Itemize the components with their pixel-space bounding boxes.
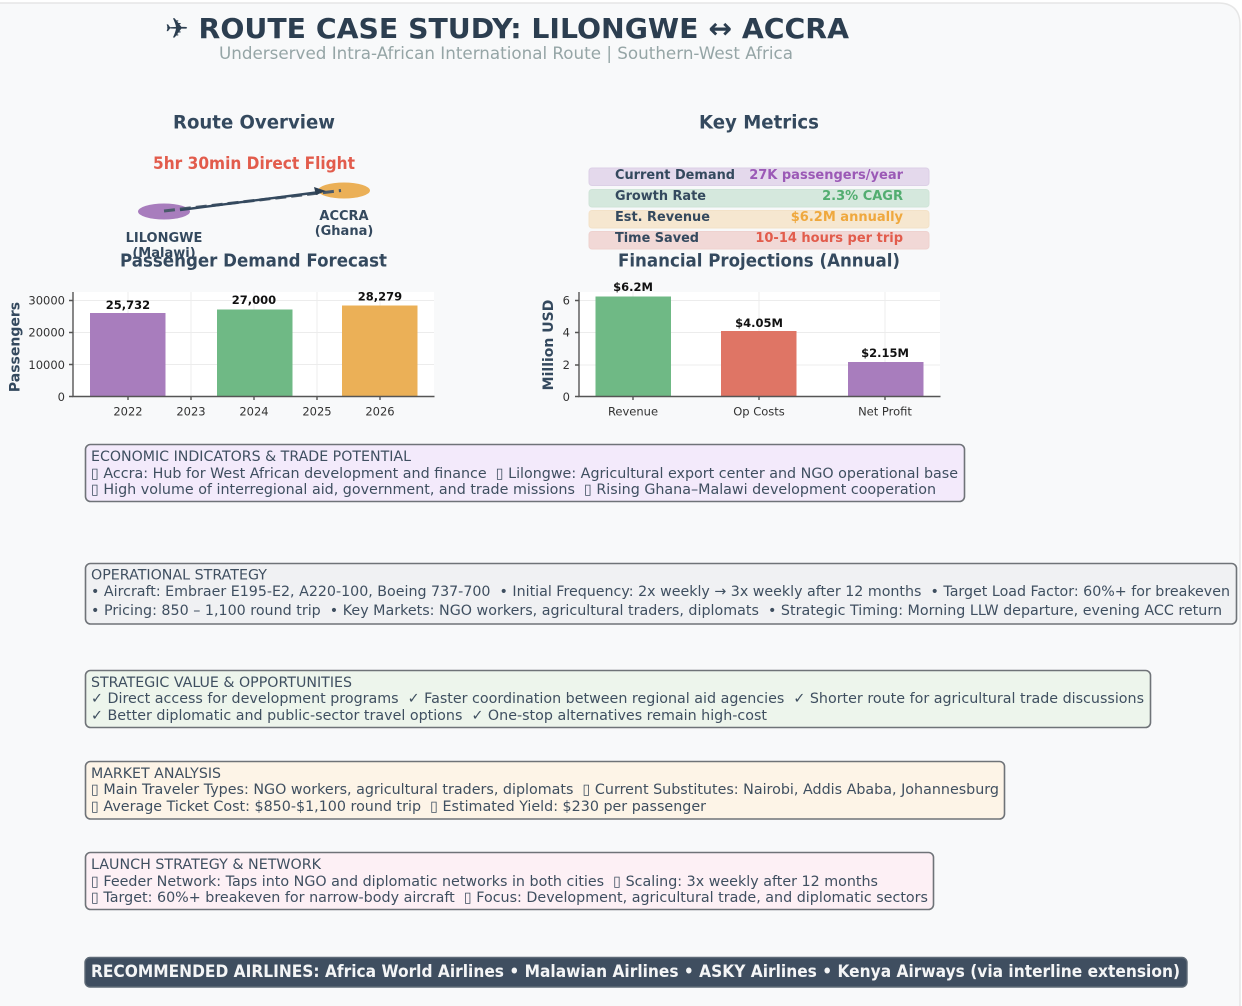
bar chart: financial projections bbox=[541, 280, 940, 418]
metric: time saved: 10-14 hours per trip bbox=[755, 231, 903, 246]
label: Accra: ACCRA bbox=[319, 209, 369, 224]
heading: STRATEGIC VALUE & OPPORTUNITIES bbox=[91, 675, 352, 691]
value labels bbox=[106, 290, 402, 312]
bar: operating costs bbox=[721, 331, 796, 396]
panel: recommended airlines: RECOMMENDED AIRLINES: Africa World Airlines • Malawian Airlines • ASKY Airlines • Kenya Airways (via interline extension) bbox=[91, 962, 1180, 981]
value labels: $2.15M bbox=[861, 346, 909, 360]
text line: ▯ Main Traveler Types: NGO workers, agricultural traders, diplomats ▯ Current Substitutes: Nairobi, Addis Ababa, Johannesburg bbox=[91, 782, 999, 798]
y axis title: Million USD bbox=[541, 300, 557, 390]
text line: • Aircraft: Embraer E195-E2, A220-100, Boeing 737-700 • Initial Frequency: 2x weekly → 3x weekly after 12 months • Target Load Factor: 60%+ for breakeven bbox=[91, 584, 1230, 600]
metric: time saved: Time Saved bbox=[615, 231, 699, 246]
x axis labels: Op Costs bbox=[733, 404, 785, 418]
panel: operational strategy bbox=[86, 564, 1236, 624]
metric: estimated revenue: Est. Revenue bbox=[615, 210, 710, 225]
heading: MARKET ANALYSIS bbox=[91, 766, 221, 782]
text line: ✓ Direct access for development programs ✓ Faster coordination between regional aid agencies ✓ Shorter route for agricultural trade discussions bbox=[91, 691, 1144, 707]
y axis labels bbox=[28, 294, 65, 404]
panel: route overview bbox=[126, 112, 373, 261]
heading: route overview: Route Overview bbox=[173, 112, 335, 134]
metric: current demand: Current Demand bbox=[615, 168, 735, 183]
metric: growth rate: Growth Rate bbox=[615, 189, 706, 204]
metric: estimated revenue bbox=[589, 210, 929, 228]
title: ✈ ROUTE CASE STUDY: LILONGWE ↔ ACCRA bbox=[165, 12, 849, 45]
y axis labels: 0 bbox=[563, 390, 570, 404]
panel: market analysis bbox=[86, 762, 1004, 819]
y axis labels: 6 bbox=[563, 294, 570, 308]
marker: Accra bbox=[318, 182, 370, 198]
bar chart: passenger demand bbox=[8, 290, 434, 418]
value labels: $4.05M bbox=[735, 316, 783, 330]
x axis labels: 2024 bbox=[239, 404, 269, 418]
panel: launch strategy bbox=[86, 852, 934, 910]
x axis labels: 2025 bbox=[302, 404, 332, 418]
label: Accra: (Ghana) bbox=[315, 224, 373, 239]
value labels: 27,000 bbox=[232, 293, 276, 307]
y axis labels: 30000 bbox=[28, 294, 65, 308]
text line: ▯ Average Ticket Cost: $850-$1,100 round trip ▯ Estimated Yield: $230 per passenger bbox=[91, 799, 706, 815]
panel: strategic value bbox=[86, 670, 1150, 728]
metric: current demand: 27K passengers/year bbox=[749, 168, 904, 183]
value labels: 25,732 bbox=[106, 298, 150, 312]
text line: ▯ Target: 60%+ breakeven for narrow-body aircraft ▯ Focus: Development, agricultural trade, and diplomatic sectors bbox=[91, 890, 928, 906]
bar: 2026 bbox=[342, 306, 418, 396]
heading: financial projections: Financial Projections (Annual) bbox=[618, 252, 900, 272]
x axis labels: 2023 bbox=[176, 404, 206, 418]
heading: OPERATIONAL STRATEGY bbox=[91, 568, 267, 584]
label: Lilongwe: LILONGWE bbox=[126, 231, 202, 246]
value labels bbox=[613, 280, 909, 360]
metric: estimated revenue: $6.2M annually bbox=[791, 210, 904, 225]
panel: recommended airlines bbox=[85, 958, 1187, 987]
panel: key metrics bbox=[589, 112, 929, 249]
text line: ▯ Feeder Network: Taps into NGO and diplomatic networks in both cities ▯ Scaling: 3x weekly after 12 months bbox=[91, 874, 878, 890]
value labels: 28,279 bbox=[358, 290, 402, 304]
y axis labels: 0 bbox=[58, 390, 65, 404]
y axis labels: 2 bbox=[563, 358, 570, 372]
panel: economic indicators bbox=[86, 444, 964, 502]
label: Lilongwe: (Malawi) bbox=[132, 246, 196, 261]
metric: growth rate bbox=[589, 189, 929, 207]
metric: time saved bbox=[589, 231, 929, 249]
subtitle: Underserved Intra-African International Route | Southern-West Africa bbox=[219, 44, 793, 64]
text line: ▯ Accra: Hub for West African development and finance ▯ Lilongwe: Agricultural export center and NGO operational base bbox=[91, 466, 958, 482]
bar: 2024 bbox=[217, 310, 292, 396]
bar: 2022 bbox=[90, 313, 166, 396]
value labels: $6.2M bbox=[613, 280, 653, 294]
x axis labels bbox=[113, 404, 395, 418]
y axis labels: 4 bbox=[563, 326, 570, 340]
x axis labels: 2022 bbox=[113, 404, 143, 418]
heading: ECONOMIC INDICATORS & TRADE POTENTIAL bbox=[91, 449, 411, 465]
flight time label: 5hr 30min Direct Flight bbox=[153, 154, 355, 173]
marker: Lilongwe bbox=[138, 204, 190, 220]
metric: current demand bbox=[589, 168, 929, 186]
heading: key metrics: Key Metrics bbox=[699, 112, 819, 134]
heading: LAUNCH STRATEGY & NETWORK bbox=[91, 857, 321, 873]
bar: revenue bbox=[596, 296, 671, 396]
x axis labels: 2026 bbox=[365, 404, 395, 418]
y axis labels bbox=[563, 294, 570, 404]
y axis labels: 10000 bbox=[28, 358, 65, 372]
x axis labels: Net Profit bbox=[858, 404, 912, 418]
metric: growth rate: 2.3% CAGR bbox=[822, 189, 903, 204]
text line: ✓ Better diplomatic and public-sector travel options ✓ One-stop alternatives remain high-cost bbox=[91, 708, 767, 724]
bar: net profit bbox=[848, 362, 924, 396]
x axis labels: Revenue bbox=[608, 404, 658, 418]
y axis labels: 20000 bbox=[28, 326, 65, 340]
heading: passenger demand forecast: Passenger Demand Forecast bbox=[120, 252, 387, 272]
text line: ▯ High volume of interregional aid, government, and trade missions ▯ Rising Ghana–Malawi development cooperation bbox=[91, 482, 936, 498]
x axis labels bbox=[608, 404, 912, 418]
y axis title: Passengers bbox=[8, 302, 24, 392]
arrow: route line bbox=[164, 187, 341, 211]
text line: • Pricing: 850 – 1,100 round trip • Key Markets: NGO workers, agricultural traders, diplomats • Strategic Timing: Morning LLW departure, evening ACC return bbox=[91, 603, 1222, 619]
